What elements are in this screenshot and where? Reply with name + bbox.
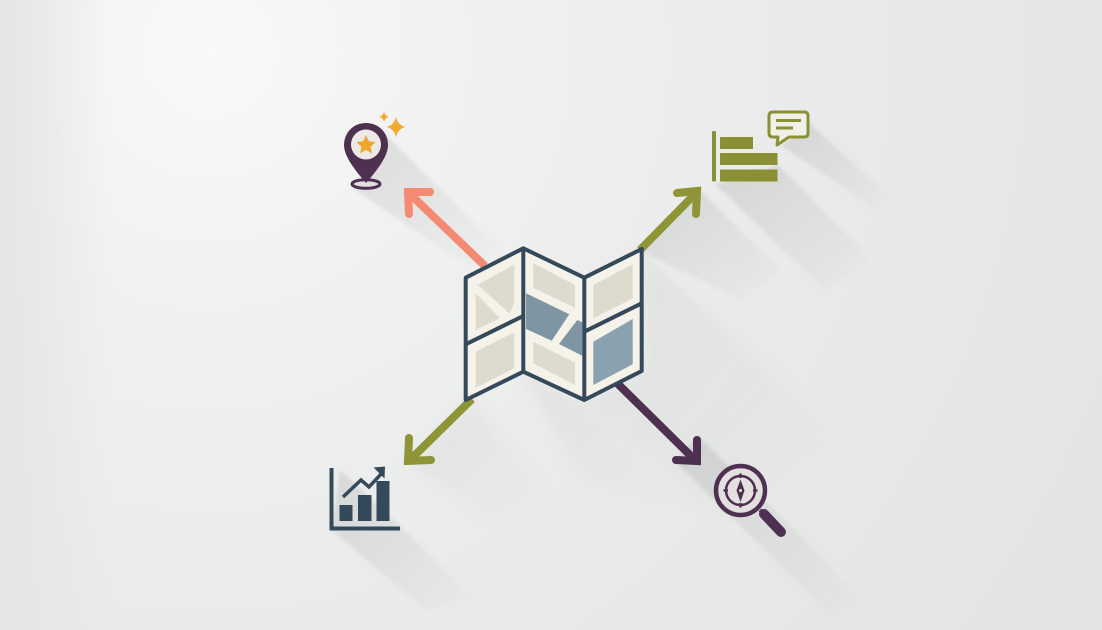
icon: horizontal bars with speech bubble bbox=[712, 112, 808, 182]
pin base ring bbox=[352, 180, 380, 188]
arrow: olive, pointing to the growth chart bbox=[408, 399, 472, 461]
compass bbox=[724, 474, 758, 508]
long cast shadows bbox=[332, 122, 893, 615]
speech bubble bbox=[769, 112, 808, 145]
arrow: olive, pointing to the bar chart and speech bubble bbox=[640, 191, 697, 250]
pin inner circle bbox=[351, 130, 381, 160]
bars axis bbox=[712, 131, 716, 182]
map: tan blocks bbox=[476, 263, 633, 388]
bars bbox=[720, 137, 778, 182]
map: outline and folds bbox=[466, 248, 642, 400]
map: blue-grey blocks bbox=[526, 293, 633, 385]
chart bars bbox=[340, 481, 390, 521]
magnifier handle bbox=[760, 510, 764, 514]
pin body bbox=[344, 123, 388, 183]
pin star bbox=[356, 135, 376, 153]
magnifier lens bbox=[716, 466, 765, 515]
icon: magnifier with compass bbox=[716, 466, 781, 532]
arrow: coral, pointing to the location pin bbox=[408, 192, 485, 266]
compass needle bbox=[736, 480, 744, 502]
arrow: purple, pointing to the magnifier bbox=[617, 383, 697, 461]
map paper bbox=[466, 248, 642, 400]
icon: folded map bbox=[466, 248, 642, 400]
chart trend arrow bbox=[343, 472, 383, 497]
sparkles bbox=[386, 116, 406, 138]
icon: rising bar chart with arrow bbox=[332, 466, 400, 528]
chart axes bbox=[332, 468, 400, 528]
icon: location pin with star and sparkles bbox=[344, 112, 406, 188]
speech bubble lines bbox=[776, 120, 801, 128]
